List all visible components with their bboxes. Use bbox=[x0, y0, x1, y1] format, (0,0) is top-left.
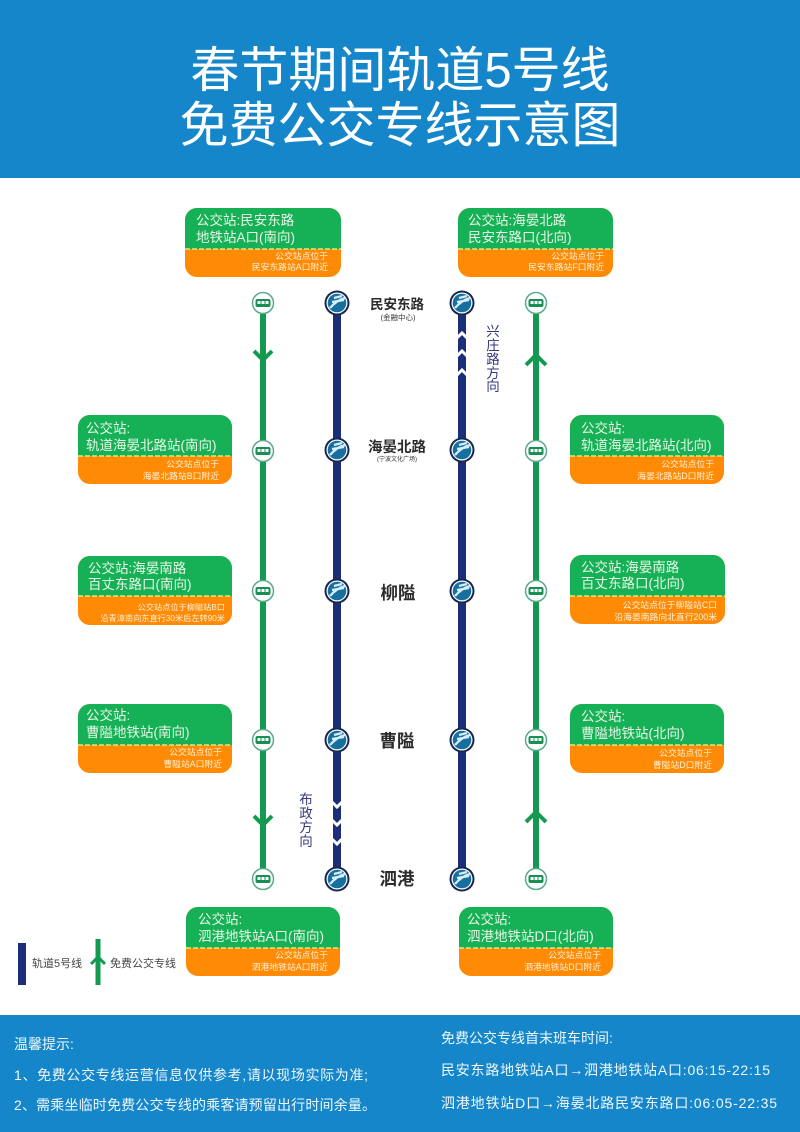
direction label: 布政方向: 向 bbox=[299, 834, 313, 849]
card: 民安东路 northbound: 民安东路站F口附近 bbox=[528, 261, 604, 272]
footer: first and last bus times bbox=[441, 1030, 777, 1111]
station names: 柳隘 bbox=[380, 583, 416, 603]
footer panel bbox=[0, 1015, 800, 1132]
card: 泗港 northbound: 公交站: bbox=[467, 911, 511, 927]
card: 海晏北路 northbound: 轨道海晏北路站(北向) bbox=[581, 438, 712, 453]
card: 曹隘 northbound: 曹隘站D口附近 bbox=[653, 759, 712, 770]
card: 曹隘 southbound: 曹隘站A口附近 bbox=[163, 758, 222, 769]
footer: tips: 2、需乘坐临时免费公交专线的乘客请预留出行时间余量。 bbox=[14, 1097, 376, 1113]
card: 柳隘 southbound: 公交站点位于柳隘站B口 bbox=[138, 602, 225, 612]
card: 柳隘 southbound: 沿青漳南向东直行30米后左转90米 bbox=[100, 613, 225, 623]
station names: (金融中心) bbox=[380, 312, 416, 322]
card: 海晏北路 northbound bbox=[570, 415, 724, 484]
card: 柳隘 southbound: 公交站:海晏南路 bbox=[88, 560, 187, 576]
card: 民安东路 northbound: 公交站:海晏北路 bbox=[468, 212, 567, 228]
card: 柳隘 northbound bbox=[570, 555, 725, 624]
card: 民安东路 southbound: 民安东路站A口附近 bbox=[252, 261, 328, 272]
card: 泗港 northbound: 公交站点位于 bbox=[548, 949, 601, 960]
station icons bbox=[324, 290, 474, 892]
card: 海晏北路 northbound: 海晏北路站D口附近 bbox=[637, 470, 714, 481]
station names: 泗港 bbox=[380, 869, 415, 889]
card: 民安东路 southbound bbox=[185, 208, 341, 277]
bus line northbound with arrows bbox=[526, 303, 546, 878]
legend bbox=[18, 939, 176, 985]
station names: 海晏北路 bbox=[368, 438, 426, 456]
header banner with title bbox=[0, 0, 800, 178]
footer: first and last bus times: 免费公交专线首末班车时间: bbox=[441, 1030, 613, 1046]
card: 民安东路 northbound bbox=[458, 208, 613, 277]
card: 曹隘 southbound bbox=[78, 704, 232, 773]
card: 民安东路 southbound: 地铁站A口(南向) bbox=[196, 230, 295, 245]
direction label: 兴庄路方向: 向 bbox=[486, 379, 500, 394]
card: 曹隘 southbound: 曹隘地铁站(南向) bbox=[86, 725, 190, 740]
card: 柳隘 southbound bbox=[78, 556, 232, 625]
footer: first and last bus times: 泗港地铁站D口→海晏北路民安东路口:06:05-22:35 bbox=[441, 1095, 777, 1111]
station names bbox=[368, 296, 426, 889]
card: 泗港 southbound: 泗港地铁站A口(南向) bbox=[198, 929, 324, 944]
card: 民安东路 northbound: 公交站点位于 bbox=[551, 250, 604, 261]
direction label: 兴庄路方向 bbox=[486, 324, 500, 394]
legend: 轨道5号线 bbox=[32, 956, 82, 970]
rail line 5 right track bbox=[457, 303, 467, 878]
card: 泗港 northbound: 泗港地铁站D口(北向) bbox=[467, 929, 594, 944]
card: 柳隘 northbound: 公交站点位于柳隘站C口 bbox=[623, 599, 717, 610]
card: 曹隘 southbound: 公交站点位于 bbox=[169, 746, 222, 757]
card: 泗港 southbound bbox=[186, 907, 340, 976]
station names: (宁波文化广场) bbox=[377, 455, 417, 463]
card: 柳隘 northbound: 公交站:海晏南路 bbox=[581, 559, 680, 575]
card: 民安东路 southbound: 公交站:民安东路 bbox=[196, 212, 295, 228]
card: 海晏北路 southbound bbox=[78, 415, 232, 484]
bus stop icons bbox=[252, 292, 546, 890]
legend: 免费公交专线 bbox=[110, 956, 176, 970]
card: 民安东路 southbound: 公交站点位于 bbox=[275, 250, 328, 261]
card: 海晏北路 southbound: 公交站点位于 bbox=[166, 458, 219, 469]
footer: first and last bus times: 民安东路地铁站A口→泗港地铁站A口:06:15-22:15 bbox=[441, 1062, 770, 1078]
card: 曹隘 northbound bbox=[570, 704, 724, 773]
card: 海晏北路 southbound: 轨道海晏北路站(南向) bbox=[86, 438, 216, 453]
card: 泗港 northbound bbox=[459, 907, 613, 976]
card: 曹隘 northbound: 公交站: bbox=[581, 708, 625, 724]
card: 海晏北路 southbound: 海晏北路站B口附近 bbox=[143, 470, 219, 481]
card: 曹隘 northbound: 公交站点位于 bbox=[659, 747, 712, 758]
footer: tips: 1、免费公交专线运营信息仅供参考,请以现场实际为准; bbox=[14, 1067, 368, 1083]
card: 海晏北路 southbound: 公交站: bbox=[86, 420, 130, 436]
direction label: 兴庄路方向: 方 bbox=[486, 366, 500, 381]
station names: 民安东路 bbox=[370, 296, 424, 312]
card: 泗港 southbound: 公交站: bbox=[198, 911, 242, 927]
rail line 5 left track bbox=[332, 303, 342, 878]
card: 海晏北路 northbound: 公交站点位于 bbox=[661, 458, 714, 469]
direction label: 布政方向: 政 bbox=[299, 806, 313, 821]
header banner with title: 免费公交专线示意图 bbox=[179, 99, 621, 153]
card: 泗港 northbound: 泗港地铁站D口附近 bbox=[524, 961, 601, 972]
direction label: 布政方向: 方 bbox=[299, 820, 313, 835]
card: 柳隘 northbound: 沿海晏南路向北直行200米 bbox=[614, 611, 717, 622]
card: 民安东路 northbound: 民安东路口(北向) bbox=[468, 230, 572, 245]
direction label: 布政方向: 布 bbox=[299, 792, 313, 807]
card: 海晏北路 northbound: 公交站: bbox=[581, 420, 625, 436]
card: 曹隘 northbound: 曹隘地铁站(北向) bbox=[581, 726, 684, 741]
direction label: 兴庄路方向: 路 bbox=[486, 352, 500, 367]
station names: 曹隘 bbox=[380, 731, 414, 751]
card: 曹隘 southbound: 公交站: bbox=[86, 707, 130, 723]
bus line southbound with arrows bbox=[254, 303, 272, 878]
direction label: 兴庄路方向: 兴 bbox=[486, 324, 500, 339]
header banner with title: 春节期间轨道5号线 bbox=[190, 44, 610, 98]
footer: tips bbox=[14, 1036, 376, 1113]
direction label: 布政方向 bbox=[299, 792, 313, 849]
card: 泗港 southbound: 泗港地铁站A口附近 bbox=[252, 961, 328, 972]
card: 泗港 southbound: 公交站点位于 bbox=[275, 949, 328, 960]
direction label: 兴庄路方向: 庄 bbox=[486, 337, 500, 353]
footer: tips: 温馨提示: bbox=[14, 1036, 74, 1052]
card: 柳隘 southbound: 百丈东路口(南向) bbox=[88, 577, 192, 592]
card: 柳隘 northbound: 百丈东路口(北向) bbox=[581, 576, 684, 591]
